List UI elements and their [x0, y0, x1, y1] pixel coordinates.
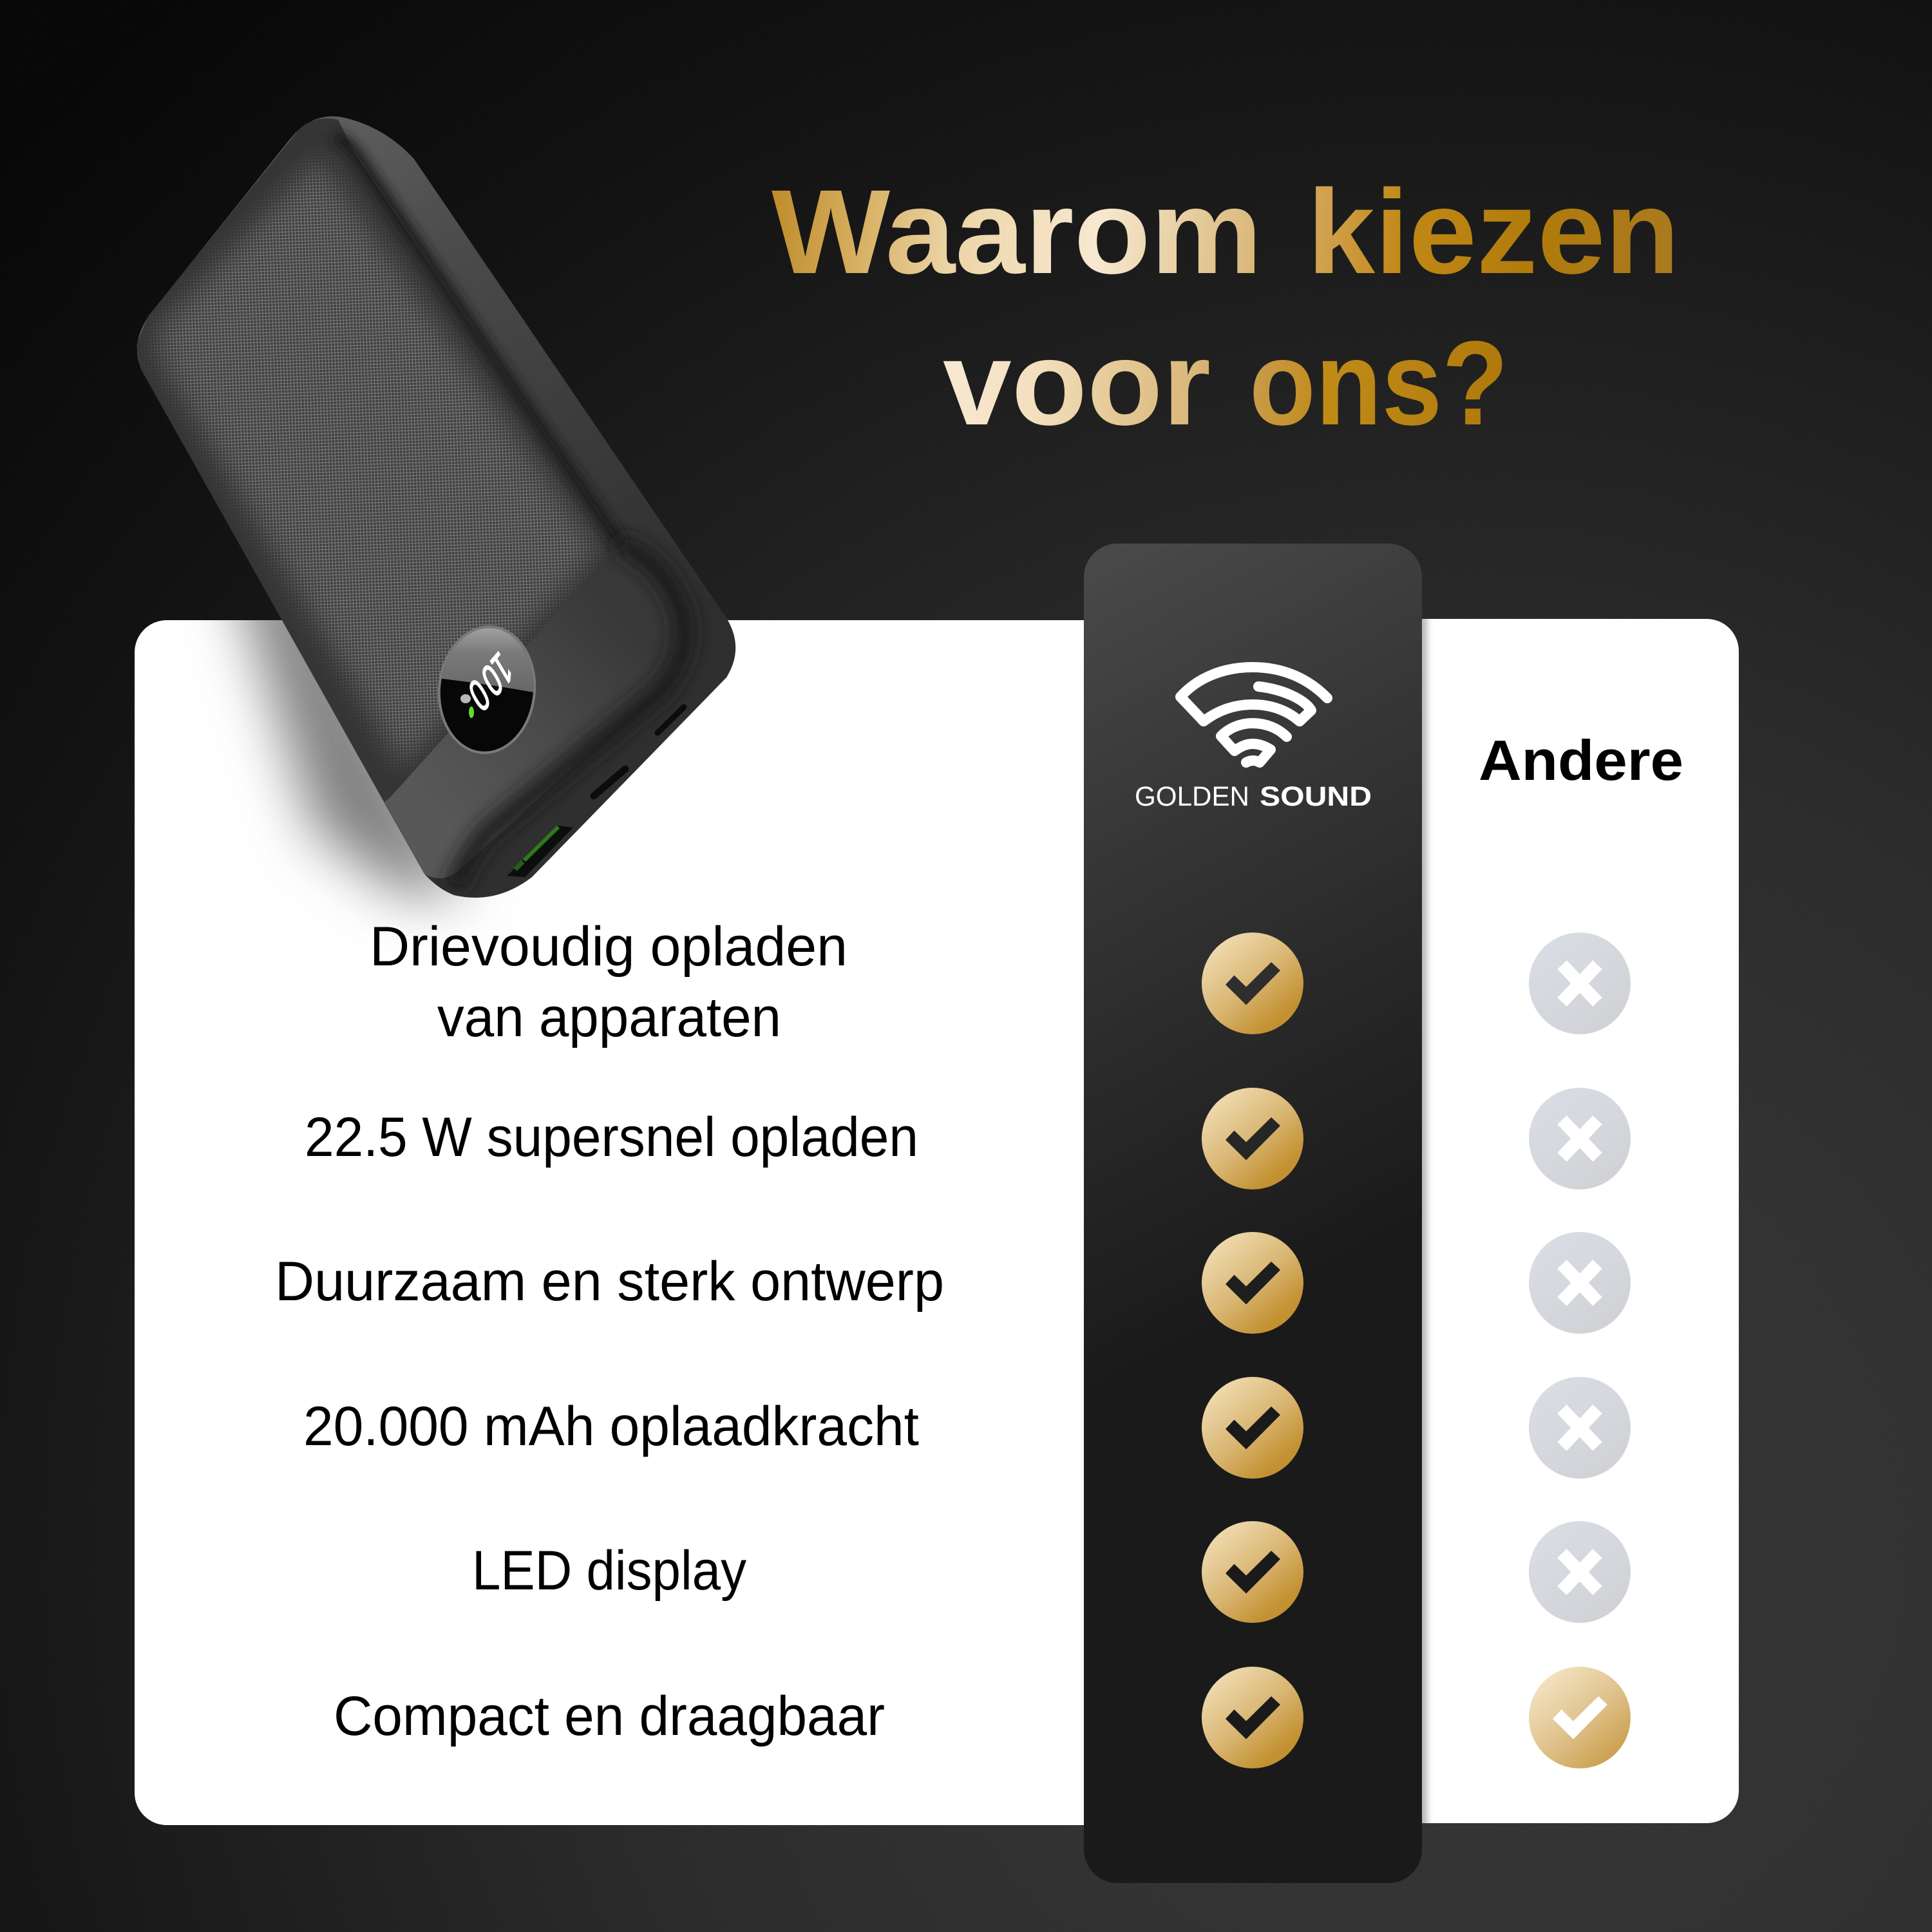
feature: durable: Duurzaam en sterk ontwerp: [275, 1251, 944, 1312]
display digits: 100: [462, 642, 520, 722]
heading: andere: Andere: [1479, 728, 1683, 792]
feature: triple charging: van apparaten: [437, 987, 781, 1048]
panel: white comparison card left: [135, 620, 1101, 1825]
check row 2: [1202, 1088, 1303, 1189]
check row 4: [1202, 1377, 1303, 1479]
product: power bank: [97, 97, 735, 898]
logo wordmark: SOUND: [1260, 781, 1372, 812]
fabric texture: [97, 97, 676, 837]
logo wordmark: [1135, 781, 1372, 812]
feature labels: [275, 916, 944, 1747]
feature: led display: LED display: [472, 1540, 746, 1602]
cross row 2: [1529, 1088, 1631, 1189]
feature: capacity: 20.000 mAh oplaadkracht: [303, 1396, 919, 1457]
body: [137, 117, 735, 898]
title: [772, 166, 1680, 450]
andere marks: [1529, 933, 1631, 1768]
cross row 5: [1529, 1521, 1631, 1623]
column shadow: [1422, 619, 1431, 1823]
title: kiezen: [1307, 166, 1680, 299]
feature: triple charging: [370, 916, 848, 1048]
logo wordmark: GOLDEN: [1135, 781, 1249, 812]
title: Waarom: [772, 166, 1262, 299]
check row 3: [1202, 1232, 1303, 1334]
creases: [335, 137, 684, 889]
front face: [137, 118, 683, 878]
check row 1: [1202, 933, 1303, 1034]
title: ons?: [1249, 317, 1508, 450]
logo: golden sound: [1135, 667, 1372, 812]
panel: white comparison card right: [1404, 619, 1739, 1823]
golden sound checks: [1202, 933, 1303, 1768]
port: usb c middle: [594, 769, 625, 796]
panel: golden sound column: [1084, 544, 1422, 1883]
port: usb a: [507, 826, 573, 877]
cross row 4: [1529, 1377, 1631, 1479]
smooth band: [384, 547, 683, 878]
check row 6: [1202, 1667, 1303, 1768]
check row 6: [1529, 1667, 1631, 1768]
title: voor: [943, 317, 1211, 450]
check row 5: [1202, 1521, 1303, 1623]
feature: triple charging: Drievoudig opladen: [370, 916, 848, 978]
display green led: [469, 706, 474, 718]
display: [431, 618, 547, 760]
cross row 1: [1529, 933, 1631, 1034]
logo icon: [1180, 667, 1327, 762]
display charge icon: [460, 694, 471, 703]
cross row 3: [1529, 1232, 1631, 1334]
product shadow on card: [216, 515, 464, 895]
port: usb c top: [658, 707, 684, 733]
feature: compact: Compact en draagbaar: [334, 1685, 885, 1747]
feature: fast charging: 22.5 W supersnel opladen: [305, 1106, 918, 1168]
